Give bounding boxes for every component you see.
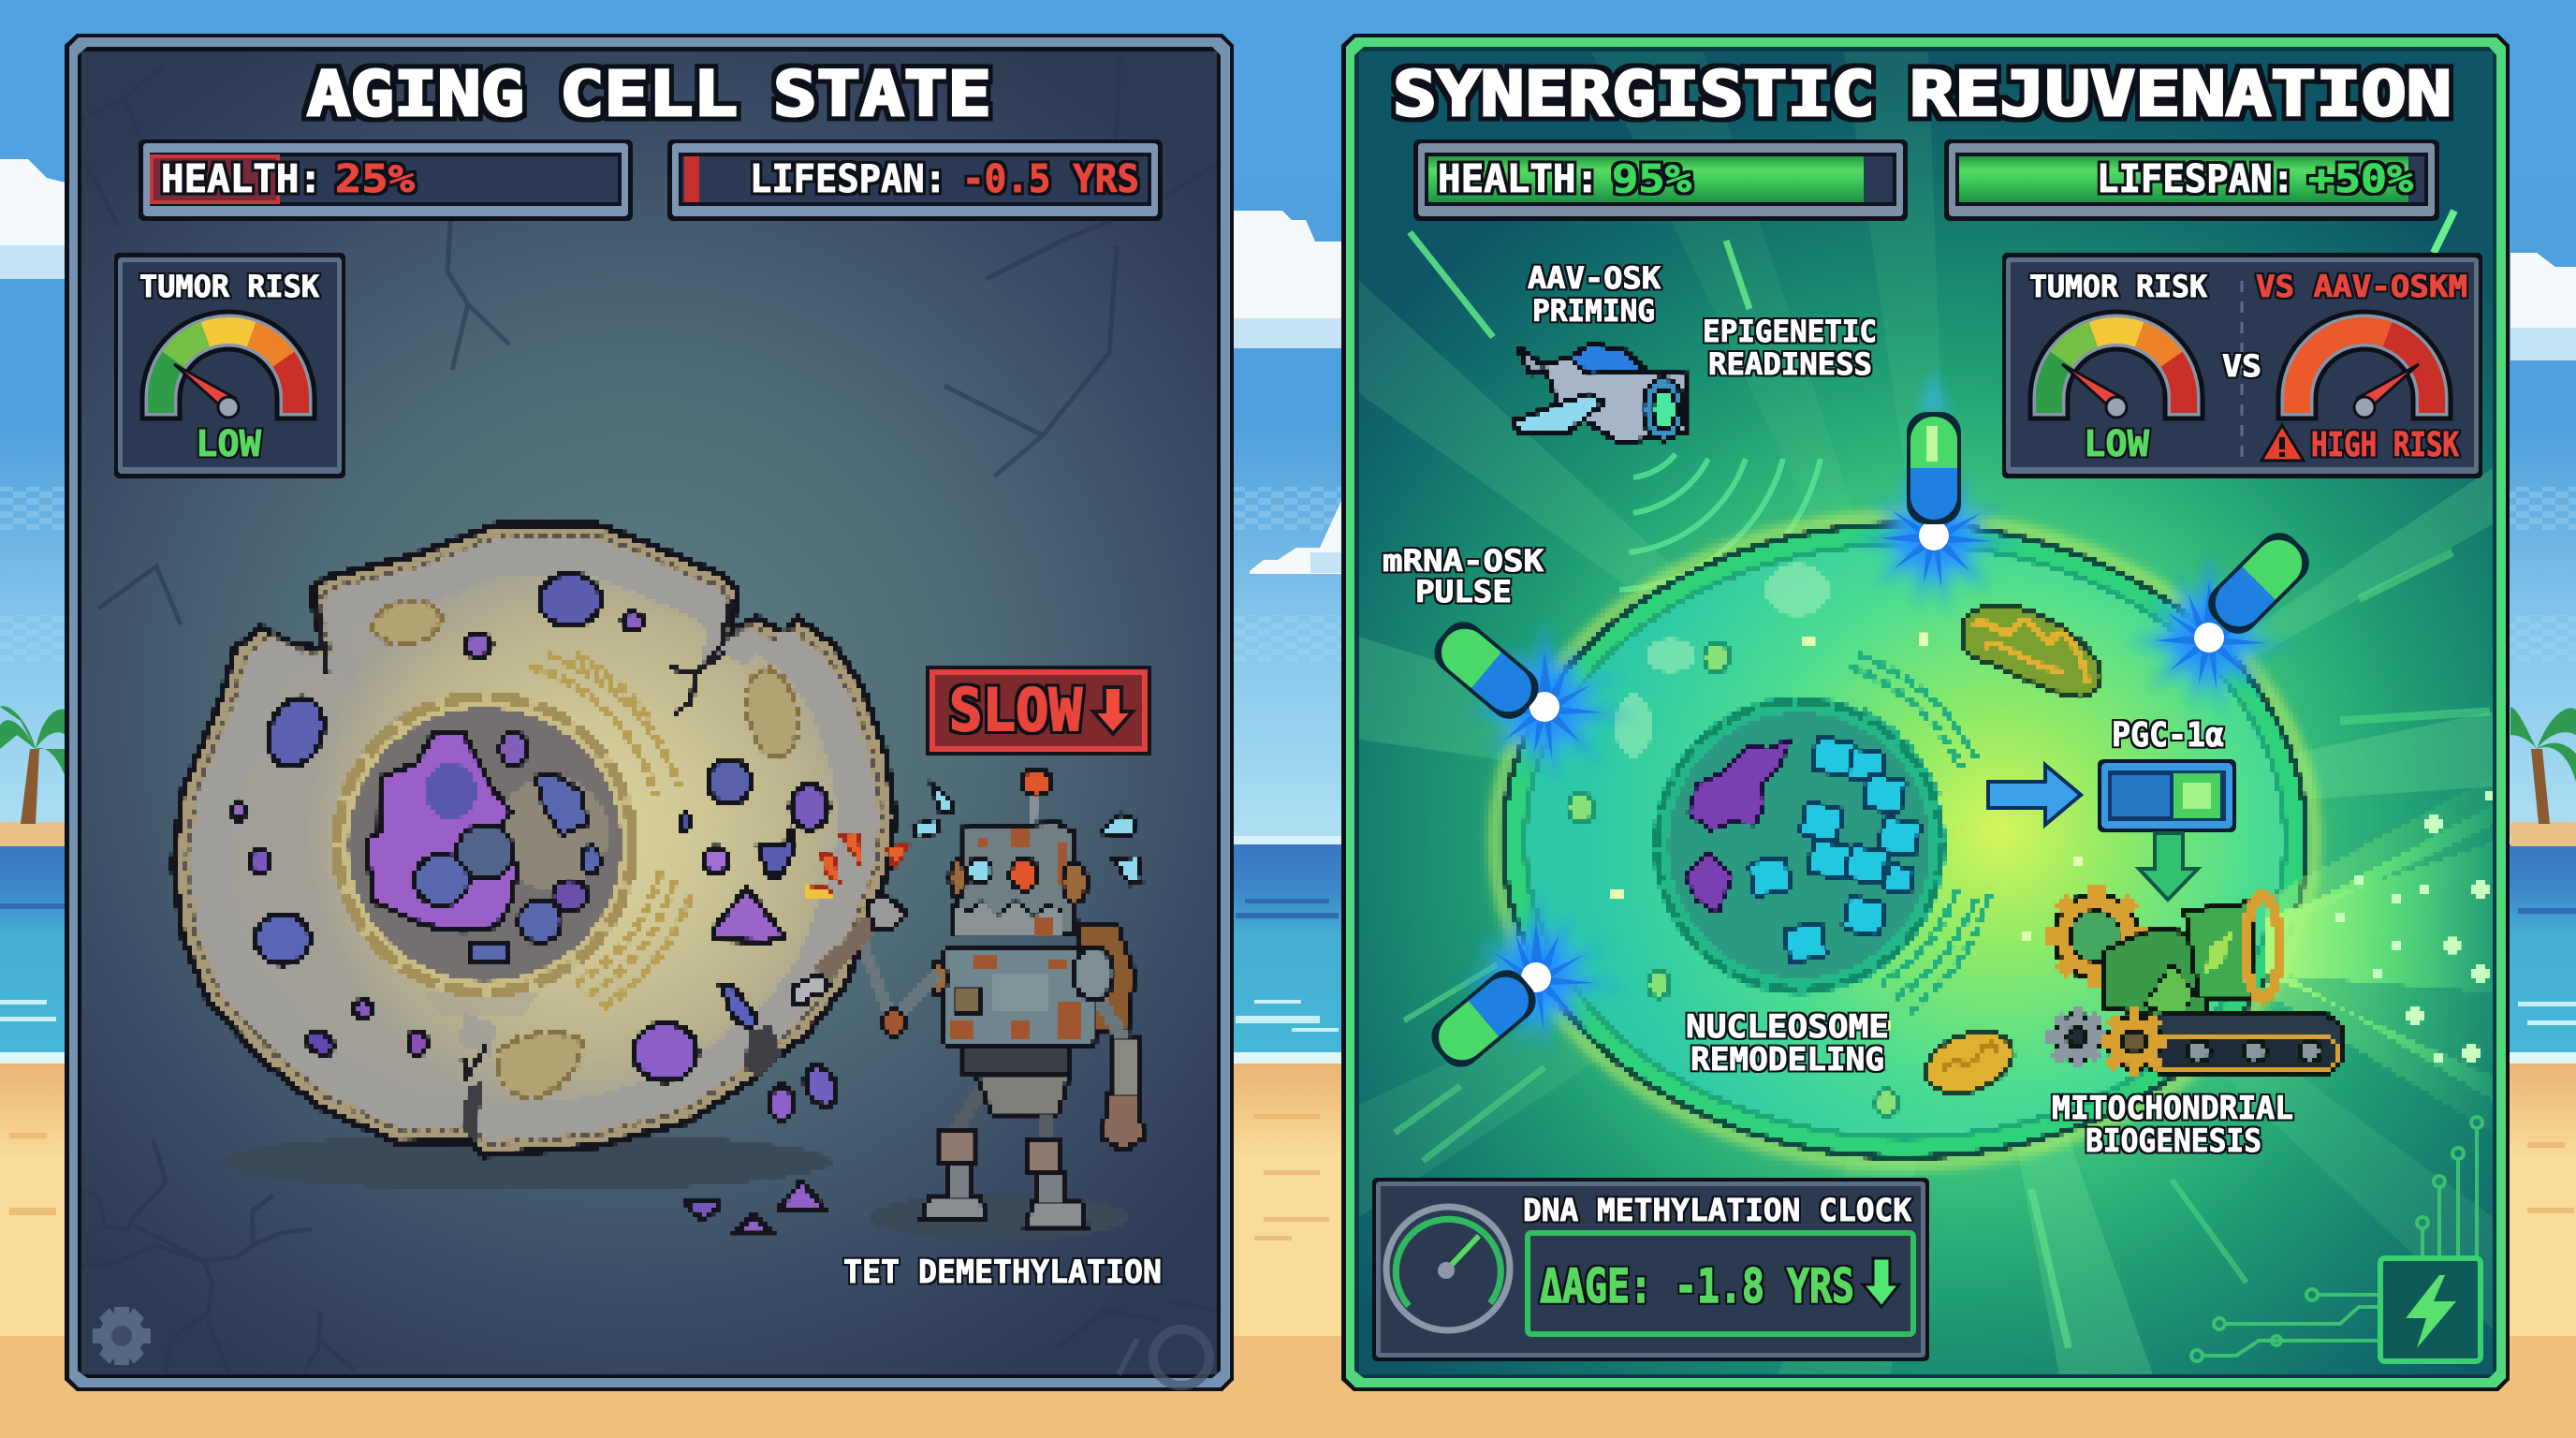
floor debris [685, 1181, 826, 1231]
rejuvenated cell [1495, 517, 2315, 1165]
robot shadow [871, 1194, 1128, 1240]
nucleus [332, 692, 637, 997]
rusty robot [794, 770, 1144, 1226]
palm tree left [0, 706, 66, 846]
highlights [1615, 564, 1829, 757]
gauge: high [2278, 312, 2451, 418]
icon: PGC-1 alpha switch [2098, 759, 2236, 832]
panel frame [65, 34, 1234, 1391]
mitochondrion upper [1962, 605, 2101, 697]
shoulder [1073, 947, 1114, 1000]
light rays [1359, 51, 2493, 1374]
lifespan bar: +50% [2308, 156, 2413, 201]
health bar: 25% [335, 156, 415, 201]
legs [955, 1086, 1053, 1142]
golgi [529, 655, 691, 1009]
gray patches [318, 712, 538, 1058]
lifespan bar: LIFESPAN: [2097, 156, 2294, 201]
icon: warning triangle [2261, 425, 2304, 461]
capsule injection: lower left [1423, 889, 1627, 1076]
lifespan bar [667, 139, 1163, 221]
arrow: switch to machine [2139, 833, 2198, 900]
small gears [2047, 1007, 2107, 1067]
icon: viral vector ship [1513, 345, 1685, 443]
lifespan bar [1944, 139, 2439, 221]
background cracks [97, 221, 1120, 1354]
vesicles and aggregates [233, 574, 842, 1120]
health bar: 95% [1612, 156, 1691, 201]
tumor risk panel: TUMOR RISK [139, 269, 320, 304]
title [1393, 58, 2452, 130]
label: AAV-OSK priming: AAV-OSK [1528, 260, 1661, 296]
lifespan bar: LIFESPAN: [750, 156, 946, 201]
health bar: HEALTH: [1438, 156, 1599, 201]
label: nucleosome remodeling: REMODELING [1690, 1041, 1884, 1078]
tumor risk comparison panel: VS [2222, 348, 2261, 384]
icon: power chip [2380, 1258, 2481, 1361]
golgi [1849, 655, 1989, 1011]
cannon [2185, 902, 2251, 997]
cytoplasm cracks [317, 599, 731, 1077]
title: STATE [773, 58, 991, 130]
sparks [805, 833, 908, 899]
gear icon bottom left [93, 1307, 151, 1365]
label: AAV-OSK priming [1528, 260, 1661, 329]
icon: down arrow [1093, 687, 1133, 734]
title [307, 58, 991, 130]
vesicles [1568, 642, 1898, 1116]
mitochondria [371, 596, 804, 1097]
tumor risk comparison panel: LOW [2084, 423, 2149, 464]
energy beam [2265, 777, 2496, 1133]
aged damaged cell [173, 524, 895, 1231]
title: REJUVENATION [1910, 58, 2452, 130]
torso [944, 949, 1095, 1045]
tumor risk panel: LOW [196, 423, 261, 464]
title: CELL [560, 58, 738, 130]
label: mitochondrial biogenesis: MITOCHONDRIAL [2052, 1090, 2293, 1127]
tumor risk comparison panel: VS AAV-OSKM [2256, 269, 2467, 304]
head [955, 823, 1076, 935]
label: epigenetic readiness [1703, 314, 1877, 382]
tumor risk comparison panel [2002, 253, 2482, 478]
right arm [1089, 983, 1128, 1114]
gauge: low [142, 312, 315, 418]
label: TET demethylation: TET DEMETHYLATION [843, 1254, 1162, 1291]
icon: green down arrow [1863, 1258, 1899, 1307]
mitochondrial biogenesis machine [2044, 885, 2344, 1077]
capsule injection: upper left [1426, 613, 1636, 788]
main gear [2044, 885, 2147, 988]
palm tree right [2510, 707, 2576, 846]
antenna [1021, 770, 1051, 829]
sweat drops [913, 785, 1142, 885]
label: mRNA-OSK pulse: mRNA-OSK [1383, 543, 1544, 579]
DNA methylation clock panel: DNA METHYLATION CLOCK [1523, 1192, 1911, 1228]
label: AAV-OSK priming: PRIMING [1532, 293, 1655, 329]
circuit traces [2191, 1117, 2482, 1361]
label: nucleosome remodeling [1686, 1008, 1889, 1078]
backpack [1076, 922, 1134, 1030]
signal waves [1610, 454, 1821, 625]
label: mRNA-OSK pulse [1383, 543, 1544, 609]
title: AGING [307, 58, 524, 130]
health bar [139, 139, 633, 221]
health bar: HEALTH: [161, 156, 322, 201]
gauge: low [2030, 312, 2203, 418]
cell shadow [222, 1133, 832, 1191]
left arm with wrench [859, 935, 938, 1021]
slow badge: SLOW [949, 676, 1083, 744]
label: nucleosome remodeling: NUCLEOSOME [1686, 1008, 1889, 1046]
hips [964, 1046, 1069, 1076]
lifespan bar: -0.5 YRS [962, 156, 1139, 201]
arrow: nucleus to PGC-1a [1988, 765, 2081, 825]
label: mitochondrial biogenesis [2052, 1090, 2293, 1160]
tumor risk panel [114, 253, 345, 478]
capsule injection: top [1850, 370, 2026, 618]
tumor risk comparison panel: HIGH RISK [2311, 426, 2459, 464]
tumor risk comparison panel: TUMOR RISK [2029, 269, 2208, 304]
label: mitochondrial biogenesis: BIOGENESIS [2086, 1123, 2261, 1160]
nucleus [1652, 696, 1946, 995]
slow badge [926, 666, 1151, 756]
panel frame [1341, 34, 2510, 1391]
title: SYNERGISTIC [1393, 58, 1875, 130]
capsule injection: upper right [2125, 524, 2318, 719]
label: mRNA-OSK pulse: PULSE [1415, 574, 1512, 609]
DNA methylation clock panel [1372, 1178, 1929, 1361]
track [2144, 1014, 2344, 1075]
panel: synergistic rejuvenation [1341, 34, 2510, 1391]
label: epigenetic readiness: EPIGENETIC [1703, 314, 1877, 349]
icon: clock dial [1386, 1207, 1510, 1330]
health bar [1413, 139, 1908, 221]
nucleosomes [1749, 736, 1921, 962]
gear icon bottom right [1119, 1329, 1209, 1386]
sparkles [1611, 634, 2083, 1029]
label: epigenetic readiness: READINESS [1708, 346, 1872, 382]
clouds [0, 159, 2576, 574]
DNA methylation clock panel: ΔAGE: -1.8 YRS [1540, 1259, 1854, 1313]
panel: aging cell state [65, 34, 1234, 1391]
mitochondrion lower [1918, 1020, 2021, 1105]
body [2103, 928, 2206, 1026]
label: PGC-1 alpha: PGC-1α [2112, 716, 2224, 755]
